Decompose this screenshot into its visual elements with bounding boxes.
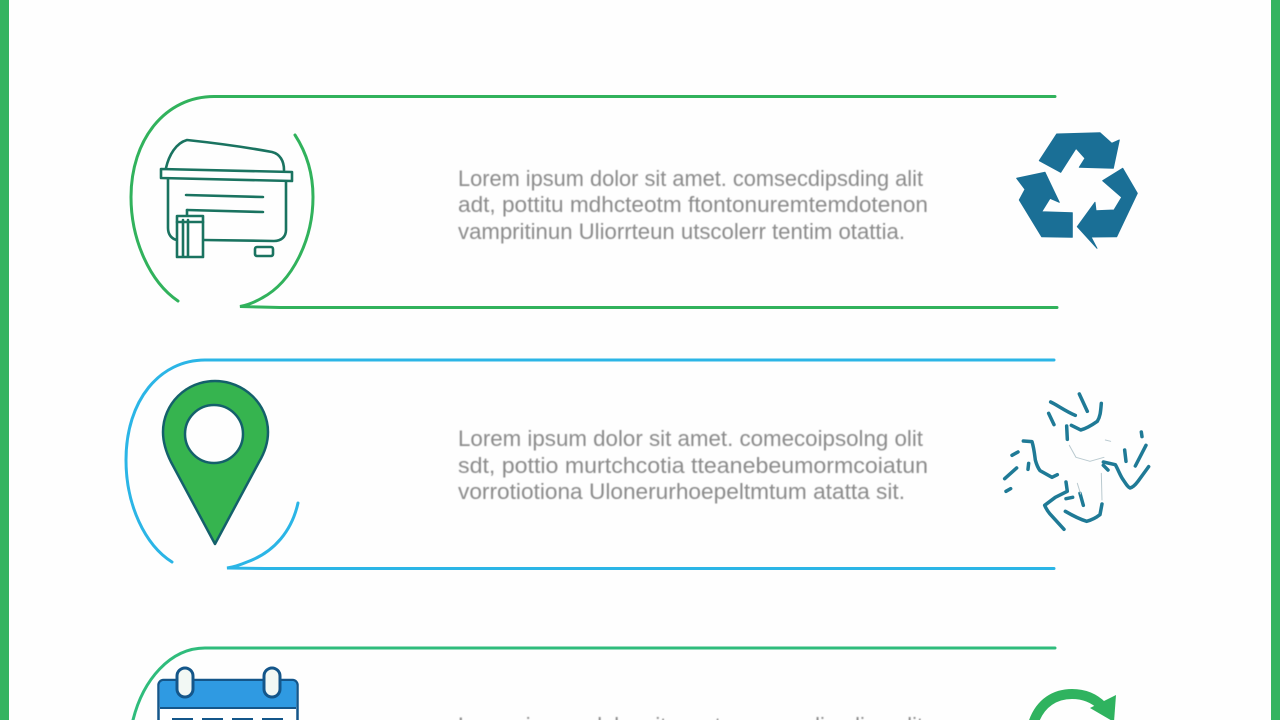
icon: calendar (158, 668, 298, 720)
text block: row 2 (458, 426, 928, 504)
panel outline: blue (126, 360, 1054, 568)
panel: row 2 location (126, 360, 1054, 568)
text block: row 1 (458, 166, 928, 244)
panel outline: teal green (133, 648, 1055, 720)
icon: waste container (161, 140, 292, 257)
icon: recycling arrows (1017, 133, 1137, 248)
icon: map pin (163, 381, 268, 544)
panel: row 3 schedule (133, 648, 1055, 720)
icon: scattered broken recycling strokes (1005, 394, 1149, 529)
panel: row 1 waste container (131, 96, 1057, 307)
text block: row 1: adt, pottitu mdhcteotm ftontonuremtemdotenon (458, 192, 928, 217)
left border bar (0, 0, 9, 720)
text block: row 1: Lorem ipsum dolor sit amet. comsecdipsding alit (458, 166, 923, 191)
text block: row 2: sdt, pottio murtchcotia tteanebeumormcoiatun (458, 453, 928, 478)
text block: row 2: Lorem ipsum dolor sit amet. comecoipsolng olit (458, 426, 923, 451)
text block: row 2: vorrotiotiona Ulonerurhoepeltmtum atatta sit. (458, 479, 905, 504)
right border bar (1271, 0, 1280, 720)
icon: green cycle arrow (1033, 694, 1116, 720)
text block: row 1: vampritinun Uliorrteun utscolerr tentim otattia. (458, 219, 905, 244)
panel outline: green (131, 96, 1057, 307)
